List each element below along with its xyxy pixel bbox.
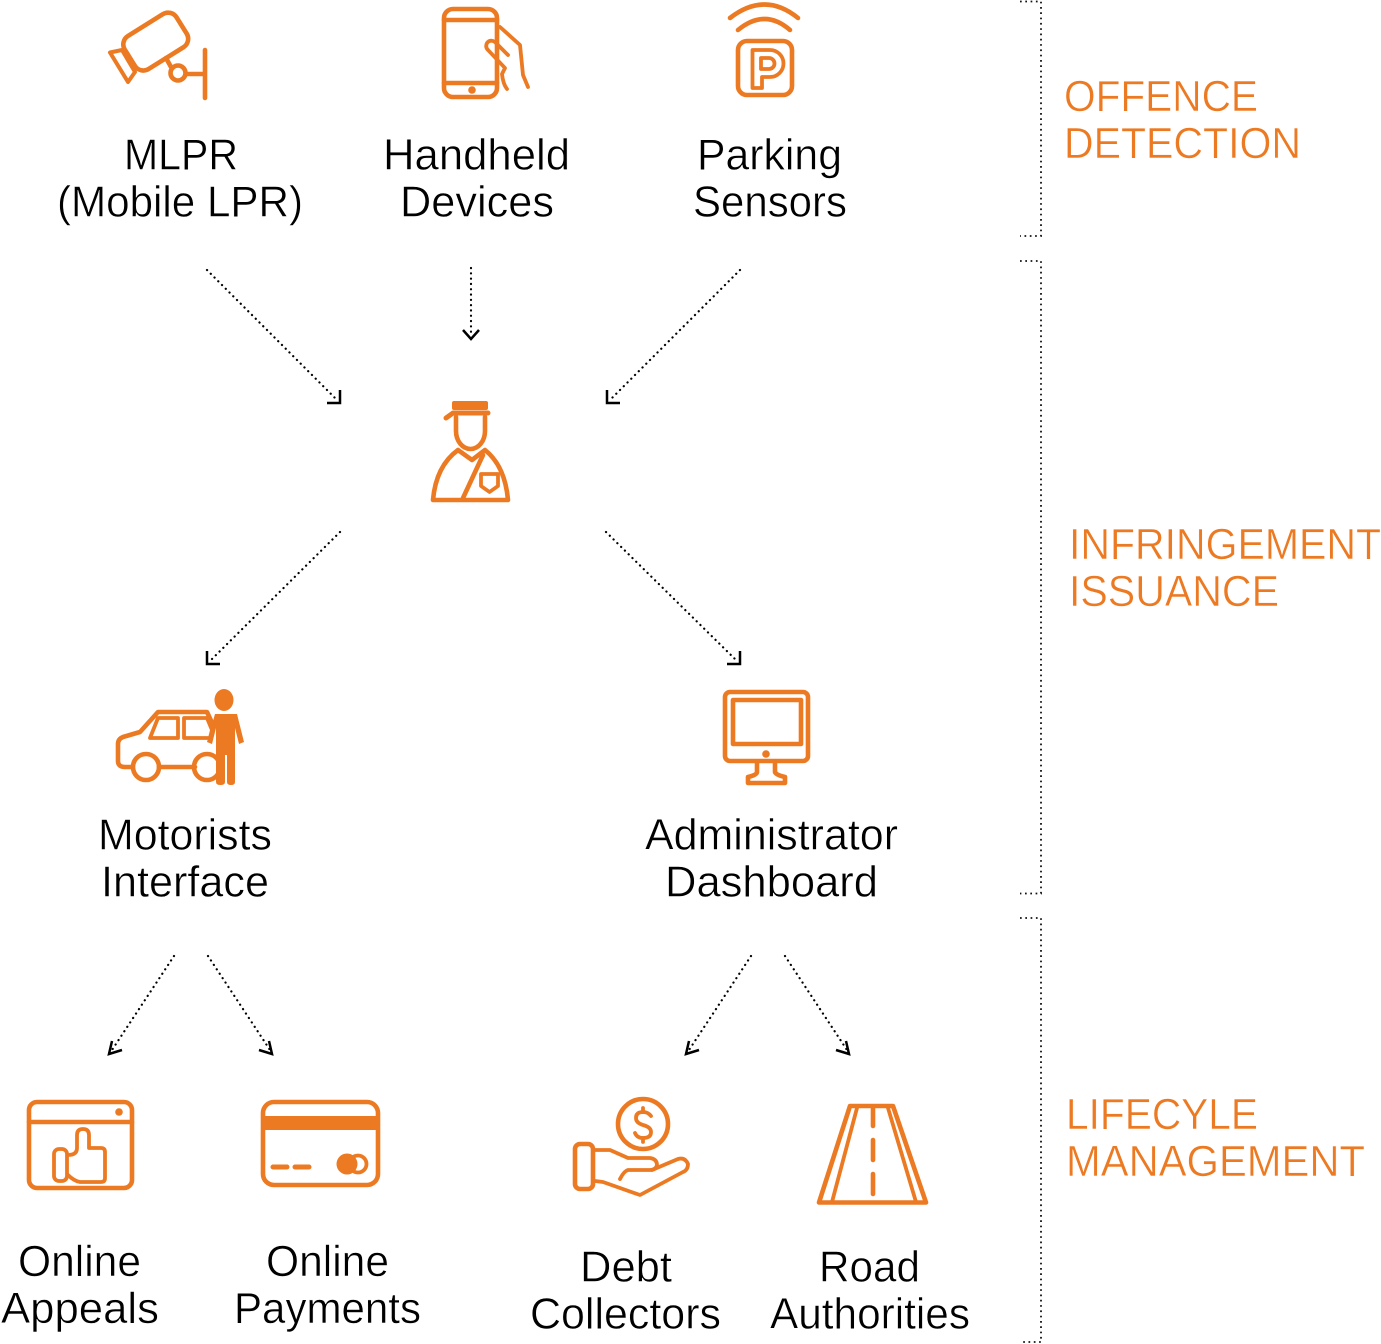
label: Road Authorities: Authorities	[770, 1290, 970, 1338]
heading: lifecycle management	[1066, 1091, 1365, 1186]
label: Online Appeals	[1, 1238, 159, 1333]
bracket: offence detection	[1020, 2, 1041, 236]
label: Online Payments	[234, 1238, 421, 1333]
label: Parking Sensors	[693, 132, 847, 226]
label: Online Appeals: Online	[18, 1238, 141, 1286]
label: Road Authorities	[770, 1244, 970, 1338]
label: Administrator Dashboard: Dashboard	[665, 858, 878, 906]
label: Debt Collectors: Debt	[580, 1244, 672, 1292]
bracket: lifecycle management	[1020, 918, 1041, 1342]
label: Online Appeals: Appeals	[1, 1285, 159, 1333]
icon: MLPR camera	[110, 9, 205, 98]
label: Motorists Interface: Motorists	[98, 812, 272, 860]
heading: infringement issuance	[1069, 521, 1381, 616]
icon: online appeals thumbs up	[29, 1102, 132, 1188]
label: MLPR: (Mobile LPR)	[57, 178, 303, 226]
arrow: officer to motorists	[207, 532, 340, 664]
icon: road	[819, 1106, 926, 1202]
label: Parking Sensors: Parking	[697, 132, 842, 180]
icon: online payments credit card	[263, 1102, 378, 1185]
label: MLPR: MLPR	[124, 132, 238, 180]
heading: offence detection	[1064, 73, 1301, 168]
arrow: dashboard to debt collectors	[686, 956, 751, 1054]
label: Parking Sensors: Sensors	[693, 178, 847, 226]
arrow: officer to administrator	[606, 532, 740, 664]
label: MLPR	[57, 132, 303, 226]
label: Motorists Interface	[98, 812, 272, 906]
arrow: dashboard to road authorities	[785, 956, 849, 1054]
label: Handheld Devices	[383, 132, 570, 226]
arrow: motorists to payments	[208, 956, 272, 1054]
icon: parking sensor	[730, 4, 798, 95]
icon: handheld device	[444, 9, 528, 97]
label: Handheld Devices: Handheld	[383, 132, 570, 180]
label: Debt Collectors: Collectors	[530, 1290, 721, 1338]
icon: parking officer	[433, 401, 508, 500]
label: Road Authorities: Road	[819, 1244, 920, 1292]
label: Debt Collectors	[530, 1244, 721, 1338]
heading: offence detection: OFFENCE	[1064, 73, 1258, 121]
label: Administrator Dashboard	[645, 812, 898, 906]
label: Online Payments: Online	[266, 1238, 389, 1286]
label: Administrator Dashboard: Administrator	[645, 812, 898, 860]
label: Motorists Interface: Interface	[101, 858, 269, 906]
icon: car and motorist	[118, 689, 244, 785]
heading: offence detection: DETECTION	[1064, 120, 1301, 168]
label: Handheld Devices: Devices	[400, 178, 554, 226]
arrow: sensors to officer	[607, 270, 740, 403]
bracket: infringement issuance	[1020, 261, 1041, 894]
icon: debt collectors hand with coin	[575, 1099, 688, 1195]
heading: lifecycle management: LIFECYLE	[1066, 1091, 1258, 1139]
heading: infringement issuance: ISSUANCE	[1069, 568, 1279, 616]
heading: lifecycle management: MANAGEMENT	[1066, 1138, 1365, 1186]
arrow: motorists to appeals	[109, 956, 174, 1054]
arrow: MLPR to officer	[207, 270, 340, 403]
arrow: handheld to officer	[463, 268, 479, 339]
label: Online Payments: Payments	[234, 1285, 421, 1333]
icon: dashboard monitor	[725, 692, 808, 783]
